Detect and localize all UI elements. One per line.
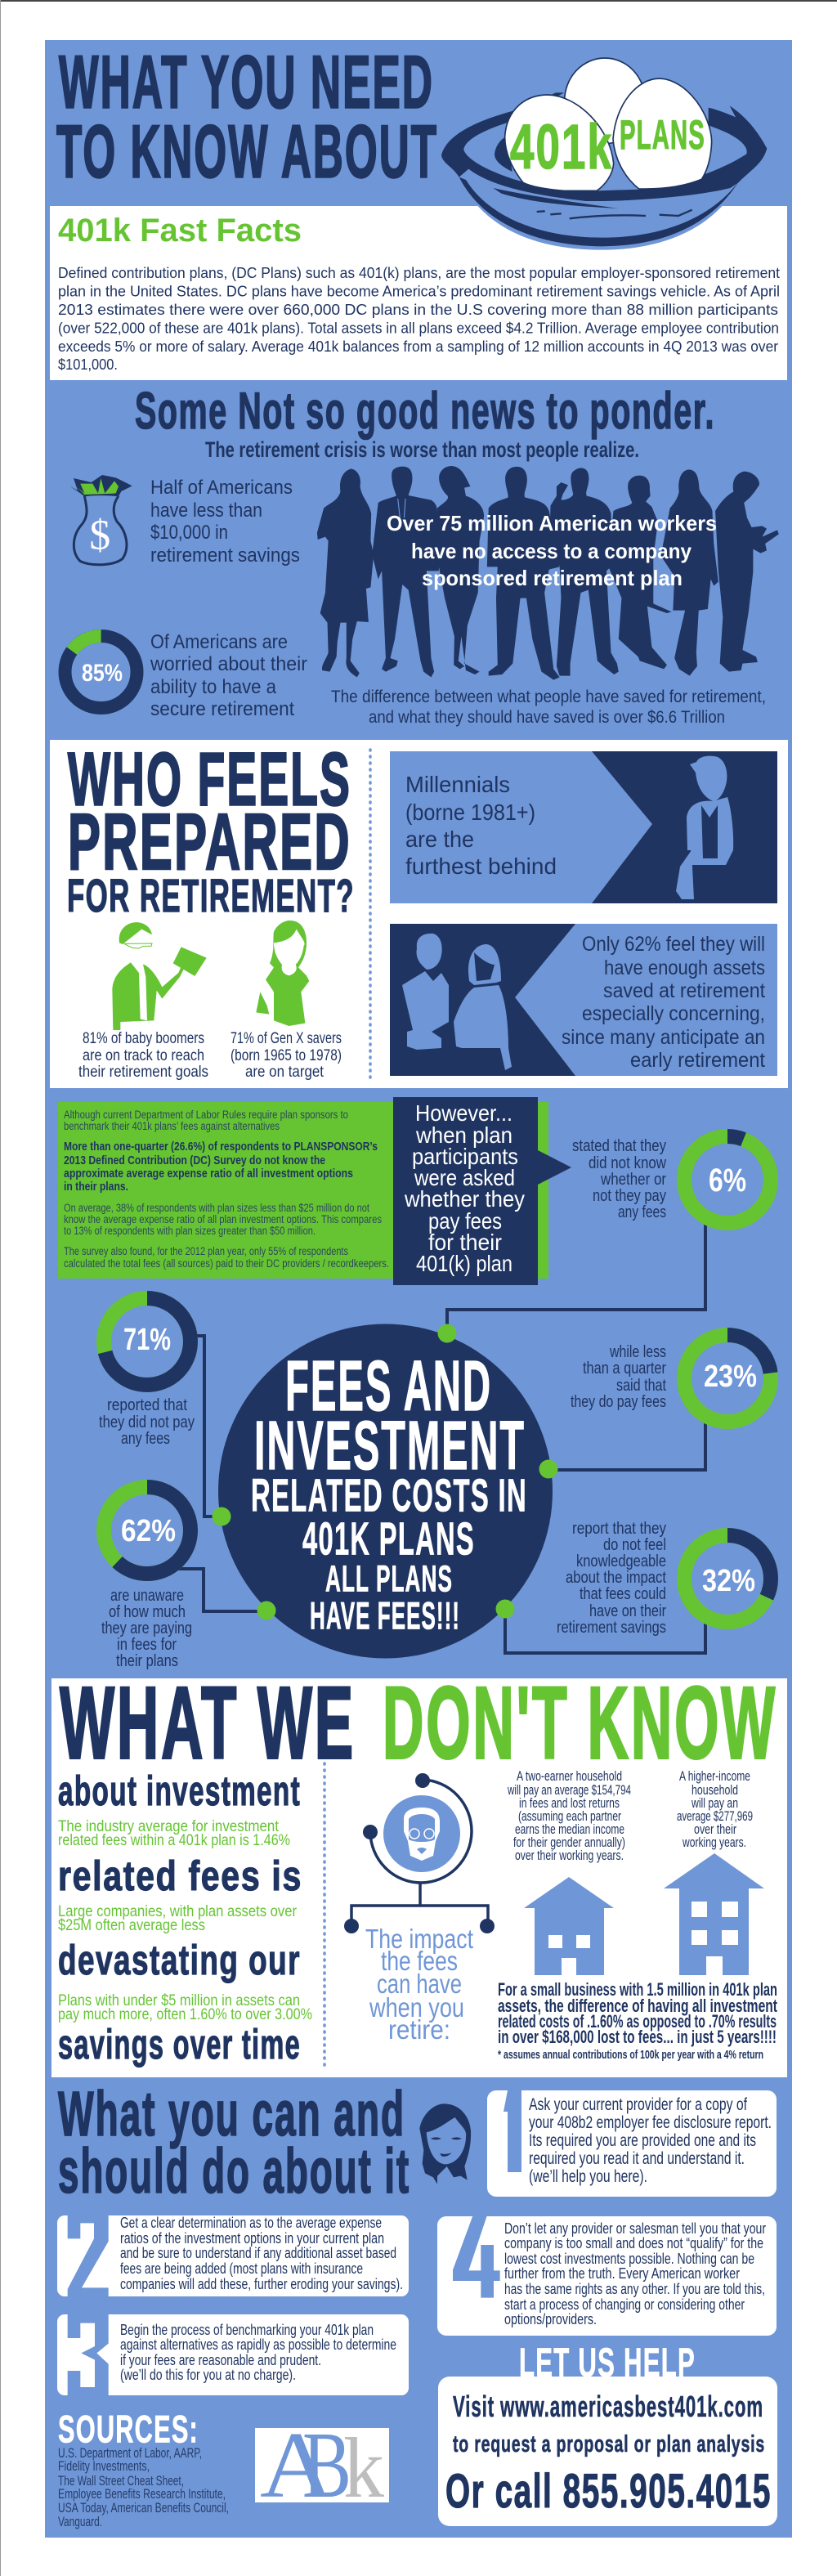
text: 6 percent label: stated that they xyxy=(572,1136,667,1155)
text: 6 percent label: any fees xyxy=(618,1203,666,1221)
text: two-earner household xyxy=(507,1769,631,1863)
white panel: fast facts xyxy=(50,206,787,380)
card: step 1: Ask your current provider for a copy of xyxy=(529,2095,747,2114)
text: the impact xyxy=(365,1924,473,2045)
card: step 3: against alternatives as rapidly as possible to determine xyxy=(120,2336,396,2353)
text: large companies xyxy=(58,1902,297,1934)
text: 62 percent label xyxy=(101,1586,192,1670)
text: sources list: Fidelity Investments, xyxy=(58,2458,150,2474)
heading: sources: SOURCES: xyxy=(58,2407,199,2451)
text: worried americans: Of Americans are xyxy=(150,631,288,653)
text: savings over time: savings over time xyxy=(58,2021,301,2068)
caption: gen x: (born 1965 to 1978) xyxy=(231,1047,342,1064)
heading: who feels prepared for retirement: PREPARED xyxy=(68,797,351,886)
callout: 75 million workers xyxy=(387,511,717,590)
text: 32 percent label xyxy=(557,1519,667,1637)
text: smaller plans: pay much more, often 1.60% to over 3.00% xyxy=(58,2005,312,2023)
callout: 75 million workers: have no access to a company xyxy=(411,539,692,563)
text: 6 percent label: did not know xyxy=(589,1154,666,1172)
circle: fees and investment: HAVE FEES!!! xyxy=(310,1594,460,1637)
caption: baby boomers: 81% of baby boomers xyxy=(83,1030,204,1047)
card: step 1: required you read it and understand it. xyxy=(529,2149,745,2168)
text: savings difference: and what they should have saved is over $6.6 Trillion xyxy=(369,708,725,727)
heading: who feels prepared for retirement: WHO FEELS xyxy=(68,737,351,821)
icon: nest with eggs xyxy=(441,58,767,250)
connector dots xyxy=(213,1324,557,1620)
text: two-earner household: will pay an average $154,794 xyxy=(507,1783,631,1798)
text block: fast facts xyxy=(58,264,780,373)
icon: tall house xyxy=(664,1853,764,1975)
callout: however: when plan xyxy=(415,1122,512,1148)
donut chart: 6% xyxy=(684,1136,771,1223)
text: two-earner household: A two-earner household xyxy=(517,1769,622,1784)
text block: fast facts: (over 522,000 of these are 401k plans). Total assets in all plans exceed $4.2 Trillion. Average employee contribution xyxy=(58,319,779,337)
text: two-earner household: earns the median income xyxy=(515,1822,624,1837)
text: 6 percent label xyxy=(572,1136,667,1221)
card: step 2: fees are being added (most plans with insurance xyxy=(120,2260,363,2277)
panel: department of labor facts: More than one-quarter (26.6%) of respondents to PLANSPONSOR’s xyxy=(64,1140,378,1154)
text: only 62 percent: since many anticipate an xyxy=(562,1026,765,1049)
circle: fees and investment: RELATED COSTS IN xyxy=(251,1470,527,1522)
numeral 3 xyxy=(68,2314,109,2395)
text: higher-income household xyxy=(677,1769,753,1850)
text: 32 percent label: have on their xyxy=(589,1602,666,1620)
donut chart: 62% xyxy=(104,1487,190,1574)
text: smaller plans: Plans with under $5 million in assets can xyxy=(58,1991,300,2009)
panel: department of labor facts: calculated the total fees (all sources) paid to their DC providers / recordkeepers. xyxy=(64,1257,389,1270)
text block: fast facts: Defined contribution plans, (DC Plans) such as 401(k) plans, are the most popular employer-sponsored retirement xyxy=(58,264,780,281)
text block: fast facts: exceeds 5% or more of salary. Average 401k balances from a sampling of 12 million accounts in 4Q 2013 was over xyxy=(58,338,778,355)
callout: however: 401(k) plan xyxy=(416,1251,512,1276)
caption: baby boomers: their retirement goals xyxy=(78,1064,208,1081)
text: sources list: The Wall Street Cheat Sheet, xyxy=(58,2473,184,2489)
text: half of americans: retirement savings xyxy=(150,544,300,567)
icon: woman face xyxy=(419,2103,471,2184)
text: 23 percent label: they do pay fees xyxy=(571,1392,666,1411)
text: worried americans: ability to have a xyxy=(150,676,277,698)
card: contact xyxy=(438,2377,777,2526)
text: two-earner household: for their gender annually) xyxy=(513,1835,625,1850)
circle: fees and investment: INVESTMENT xyxy=(254,1407,526,1484)
panel: department of labor facts: know the average expense ratio of all plan investment options. This compares xyxy=(64,1213,382,1225)
text: millennials: Millennials xyxy=(405,772,510,797)
text: smaller plans xyxy=(58,1991,312,2023)
circle: fees and investment: FEES AND xyxy=(285,1346,492,1426)
text: higher-income household: working years. xyxy=(682,1835,746,1850)
text: 23 percent label: than a quarter xyxy=(583,1359,666,1378)
subheading: retirement crisis: The retirement crisis is worse than most people realize. xyxy=(205,437,639,462)
callout: however: were asked xyxy=(414,1165,515,1190)
donut chart: 32% xyxy=(684,1535,771,1622)
text: worried americans xyxy=(150,631,307,720)
text: higher-income household: over their xyxy=(694,1822,736,1837)
text: millennials xyxy=(405,772,557,879)
text: half of americans xyxy=(150,477,300,567)
logo: ABk: k xyxy=(343,2420,384,2516)
text: about investment: about investment xyxy=(58,1767,301,1814)
card: step 4: further from the truth. Every American worker xyxy=(504,2265,740,2282)
callout: however xyxy=(393,1097,571,1285)
text: two-earner household: (assuming each partner xyxy=(518,1809,621,1824)
caption: gen x: 71% of Gen X savers xyxy=(231,1030,342,1047)
text: industry average: The industry average for investment xyxy=(58,1817,279,1835)
text: savings difference xyxy=(331,688,766,727)
logo: ABk xyxy=(255,2413,389,2517)
text: worried americans: secure retirement xyxy=(150,698,294,720)
text: sources list: Vanguard. xyxy=(58,2514,102,2529)
circle: fees and investment: ALL PLANS xyxy=(325,1558,453,1599)
back egg xyxy=(565,58,645,144)
card: step 3 xyxy=(57,2314,409,2395)
text: devastating our: devastating our xyxy=(58,1937,301,1983)
text block: fast facts: 2013 estimates there were over 660,000 DC plans in the U.S covering more than 88 million participants xyxy=(58,301,778,318)
text: sources list xyxy=(58,2445,229,2529)
text: 32 percent label: that fees could xyxy=(580,1584,666,1603)
card: step 2: ratios of the investment options in your current plan xyxy=(120,2230,384,2247)
panel: millennials xyxy=(390,751,777,903)
donut chart: 71% xyxy=(104,1298,190,1385)
numeral 1 xyxy=(504,2090,521,2172)
text: 32 percent label: do not feel xyxy=(603,1535,666,1554)
text: sources list: U.S. Department of Labor, AARP, xyxy=(58,2445,202,2461)
icon: money bag: $ xyxy=(89,513,110,559)
text: the impact: retire: xyxy=(388,2014,450,2045)
numeral 4 xyxy=(453,2216,500,2298)
caption: gen x: are on target xyxy=(245,1064,325,1081)
text: two-earner household: in fees and lost returns xyxy=(519,1796,620,1811)
heading: who feels prepared for retirement xyxy=(67,737,355,922)
heading: what you can and should do: should do about it xyxy=(58,2136,410,2206)
callout: 75 million workers: Over 75 million American workers xyxy=(387,511,717,535)
donut chart: 85%: 85% xyxy=(82,660,123,687)
text: millennials: are the xyxy=(405,827,474,852)
left egg xyxy=(505,95,614,190)
donut chart: 62%: 62% xyxy=(121,1514,176,1548)
heading: what we don't know: WHAT WE xyxy=(60,1666,356,1781)
text: the impact: can have xyxy=(377,1969,462,1999)
numeral 2 xyxy=(68,2215,109,2297)
text: sources list: Employee Benefits Research Institute, xyxy=(58,2486,226,2502)
text: industry average xyxy=(58,1817,290,1849)
card: step 3: if your fees are reasonable and prudent. xyxy=(120,2352,321,2368)
panel: who feels prepared xyxy=(50,737,788,1088)
text: related fees is: related fees is xyxy=(58,1852,302,1899)
card: step 4: start a process of changing or considering other xyxy=(504,2296,745,2313)
card: step 4: options/providers. xyxy=(504,2311,597,2327)
text: industry average: related fees within a 401k plan is 1.46% xyxy=(58,1831,290,1849)
text: 23 percent label: said that xyxy=(616,1376,666,1395)
text: only 62 percent: have enough assets xyxy=(604,956,765,979)
panel: department of labor facts: Although current Department of Labor Rules require plan sponsors to xyxy=(64,1109,348,1121)
icon: small house xyxy=(524,1877,614,1975)
panel: what we don't know xyxy=(51,1666,787,2077)
heading: what you can and should do: What you can and xyxy=(58,2079,405,2149)
heading: 401k Fast Facts: 401k Fast Facts xyxy=(58,213,302,249)
callout: however: for their xyxy=(428,1230,502,1255)
callout: 75 million workers: sponsored retirement plan xyxy=(422,566,683,590)
card: step 4: Don’t let any provider or salesman tell you that your xyxy=(504,2220,766,2237)
panel: department of labor facts: to 13% of respondents with plan sizes greater than $50 million. xyxy=(64,1225,316,1237)
text: 71 percent label: reported that xyxy=(107,1396,187,1414)
card: step 3: Begin the process of benchmarking your 401k plan xyxy=(120,2322,374,2338)
card: step 2 xyxy=(57,2215,409,2297)
text: 23 percent label: while less xyxy=(609,1342,666,1361)
heading: who feels prepared for retirement: FOR RETIREMENT? xyxy=(67,870,355,922)
heading: what you can and should do xyxy=(58,2079,410,2206)
text: large companies: $25M often average less xyxy=(58,1916,205,1934)
text: worried americans: worried about their xyxy=(150,653,307,675)
caption: gen x xyxy=(231,1030,342,1081)
icon: retiree portrait with orbit xyxy=(344,1773,495,1933)
right egg xyxy=(613,78,712,189)
text: 32 percent label: knowledgeable xyxy=(576,1552,666,1570)
heading: let us help: LET US HELP xyxy=(519,2340,696,2386)
panel: department of labor facts: in their plans. xyxy=(64,1180,128,1194)
card: step 2: and be sure to understand if any additional asset based xyxy=(120,2245,396,2261)
text: only 62 percent: especially concerning, xyxy=(582,1002,765,1025)
donut chart: 71%: 71% xyxy=(123,1323,171,1357)
text: half of americans: Half of Americans xyxy=(150,477,293,499)
card: step 4 xyxy=(437,2216,777,2336)
text: only 62 percent xyxy=(562,933,765,1072)
text: savings difference: The difference between what people have saved for retirement, xyxy=(331,688,766,706)
text: 32 percent label: retirement savings xyxy=(557,1618,666,1637)
text: 62 percent label: they are paying xyxy=(101,1619,192,1637)
text: large companies: Large companies, with plan assets over xyxy=(58,1902,297,1920)
circle: fees and investment: 401K PLANS xyxy=(302,1512,475,1565)
text: 62 percent label: their plans xyxy=(116,1651,178,1670)
text: only 62 percent: Only 62% feel they will xyxy=(582,933,765,956)
text: 71 percent label xyxy=(99,1396,195,1448)
icon: young man xyxy=(676,756,733,899)
text: millennials: furthest behind xyxy=(405,853,557,879)
card: step 4: has the same rights as any other. If you are told this, xyxy=(504,2281,765,2297)
circle: fees and investment xyxy=(218,1324,553,1658)
donut chart: 85% xyxy=(51,622,151,722)
panel: department of labor facts: 2013 Defined Contribution (DC) Survey do not know the xyxy=(64,1154,325,1167)
card: step 4: lowest cost investments possible. Nothing can be xyxy=(504,2251,754,2267)
card: step 4: company is too small and does not “qualify” for the xyxy=(504,2235,763,2251)
panel: department of labor facts: approximate average expense ratio of all investment options xyxy=(64,1167,353,1180)
donut chart: 23%: 23% xyxy=(704,1360,757,1394)
icon: two women xyxy=(402,934,512,1070)
caption: baby boomers xyxy=(78,1030,208,1081)
text: 71 percent label: any fees xyxy=(121,1429,170,1448)
text block: fast facts: $101,000. xyxy=(58,356,118,373)
text: millennials: (borne 1981+) xyxy=(405,800,535,825)
text: 6 percent label: whether or xyxy=(600,1170,666,1189)
icon: green man with tablet xyxy=(112,922,207,1030)
panel: department of labor facts: On average, 38% of respondents with plan sizes less than $25 million do not xyxy=(64,1202,369,1214)
text: the impact: The impact xyxy=(365,1924,473,1954)
panel: department of labor facts xyxy=(58,1102,548,1279)
connector lines xyxy=(176,1222,705,1653)
text: higher-income household: will pay an xyxy=(691,1796,738,1811)
text: 6 percent label: not they pay xyxy=(593,1186,667,1205)
callout: however: whether they xyxy=(404,1186,525,1212)
icon: money bag xyxy=(69,475,132,565)
caption: baby boomers: are on track to reach xyxy=(83,1047,204,1064)
egg label: 401k: 401k xyxy=(510,112,613,182)
card: step 1: (we’ll help you here). xyxy=(529,2167,647,2186)
logo: ABk: A xyxy=(260,2413,333,2517)
silhouettes: eight workers xyxy=(317,466,779,680)
text: sources list: USA Today, American Benefits Council, xyxy=(58,2500,229,2516)
text: only 62 percent: early retirement xyxy=(630,1049,765,1072)
text block: fast facts: plan in the United States. DC plans have become America’s predominant retirement savings vehicle. As of April xyxy=(58,283,780,299)
card: step 3: (we’ll do this for you at no charge). xyxy=(120,2367,296,2383)
text: the impact: when you xyxy=(369,1992,464,2023)
text: half of americans: have less than xyxy=(150,500,262,522)
card: step 2: Get a clear determination as to the average expense xyxy=(120,2215,382,2231)
card: step 2: companies will add these, further eroding your savings). xyxy=(120,2276,403,2292)
main title: TO KNOW ABOUT xyxy=(56,111,438,193)
logo: ABk: B xyxy=(302,2413,351,2517)
text: 32 percent label: report that they xyxy=(572,1519,667,1538)
text: 23 percent label xyxy=(571,1342,666,1411)
callout: however: participants xyxy=(412,1144,518,1169)
panel: only 62 percent xyxy=(390,924,777,1076)
icon: green woman xyxy=(256,921,309,1026)
text: 71 percent label: they did not pay xyxy=(99,1413,195,1431)
panel: department of labor facts: The survey also found, for the 2012 plan year, only 55% of respondents xyxy=(64,1245,348,1257)
card: step 1: Its required you are provided one and its xyxy=(529,2131,756,2150)
text: 62 percent label: of how much xyxy=(109,1602,186,1621)
text: higher-income household: A higher-income xyxy=(679,1769,750,1784)
text: only 62 percent: saved at retirement xyxy=(603,979,765,1002)
text: two-earner household: over their working years. xyxy=(515,1848,624,1863)
main title xyxy=(56,41,438,193)
text: higher-income household: household xyxy=(692,1783,738,1798)
callout: however: However... xyxy=(415,1100,512,1126)
text: 62 percent label: in fees for xyxy=(117,1635,177,1654)
text: 32 percent label: about the impact xyxy=(566,1568,666,1587)
donut chart: 6%: 6% xyxy=(709,1163,746,1198)
donut chart: 32%: 32% xyxy=(702,1564,755,1598)
text: 62 percent label: are unaware xyxy=(110,1586,184,1605)
text: the impact: the fees xyxy=(381,1946,458,1976)
text: higher-income household: average $277,969 xyxy=(677,1809,753,1824)
callout: however: pay fees xyxy=(428,1208,502,1234)
egg label: PLANS: PLANS xyxy=(620,112,705,158)
card: step 1 xyxy=(487,2090,777,2197)
panel: department of labor facts: benchmark their 401k plans’ fees against alternatives xyxy=(64,1120,280,1132)
main title: WHAT YOU NEED xyxy=(59,41,434,124)
text: half of americans: $10,000 in xyxy=(150,522,228,544)
text: small business example xyxy=(498,1979,777,2047)
donut chart: 23% xyxy=(684,1335,771,1422)
